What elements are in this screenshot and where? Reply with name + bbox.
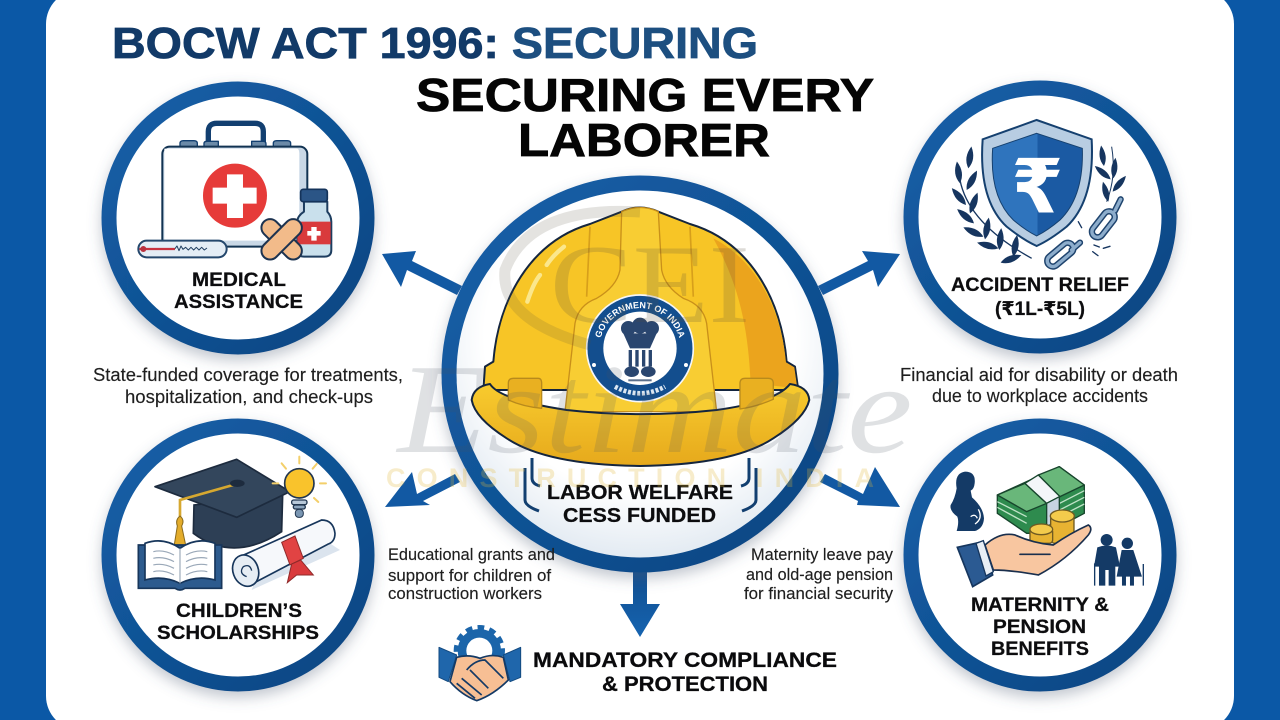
label: (₹1L-₹5L) [995, 299, 1085, 320]
diploma scroll [228, 520, 340, 590]
text: maternity description [744, 545, 893, 603]
label: SCHOLARSHIPS [157, 623, 319, 644]
label: CHILDREN’S [176, 601, 302, 622]
laurel right [1093, 145, 1128, 202]
label: CESS FUNDED [563, 505, 716, 527]
text: maternity description: Maternity leave pay [751, 545, 893, 564]
label: BENEFITS [991, 639, 1089, 660]
text: scholarship description: construction workers [388, 584, 542, 603]
broken chain [1045, 199, 1121, 269]
text: medical description: State-funded coverage for treatments, [93, 365, 403, 385]
label [951, 275, 1129, 320]
pregnant woman silhouette [950, 472, 984, 531]
icon: medicine bottle [297, 189, 331, 257]
hand [985, 525, 1091, 575]
lightbulb [273, 457, 326, 517]
laurel left [949, 146, 1032, 266]
watermark: CONSTRUCTION INDIA [386, 463, 874, 493]
panel: children's scholarships [109, 426, 367, 684]
icon: handshake and gear [439, 627, 521, 701]
icon: thermometer [138, 241, 227, 257]
coins [1030, 510, 1074, 543]
text: compliance: & PROTECTION [602, 673, 768, 696]
cash stack [997, 467, 1084, 533]
panel: medical assistance [109, 89, 367, 347]
icon: graduation cap, book, scroll and bulb [138, 457, 340, 590]
text: compliance: MANDATORY COMPLIANCE [533, 649, 837, 672]
title [112, 19, 874, 166]
text: compliance [533, 649, 837, 696]
label [174, 270, 303, 313]
title: LABORER [518, 114, 770, 166]
label [157, 601, 319, 644]
text: maternity description: for financial security [744, 584, 893, 603]
government emblem [586, 294, 694, 402]
label: MATERNITY & [971, 595, 1109, 616]
government emblem: GOVERNMENT OF INDIA [596, 302, 684, 338]
bracket lines [525, 458, 756, 511]
icon: shield with rupee and laurel [949, 120, 1128, 269]
label: ACCIDENT RELIEF [951, 275, 1129, 296]
panel: accident relief [911, 88, 1169, 346]
icon: hand with money and figures [950, 467, 1143, 587]
elderly couple [1094, 534, 1143, 586]
arrows from hub to benefits [382, 251, 900, 637]
text: scholarship description: support for children of [388, 566, 551, 585]
text: accident description: due to workplace accidents [932, 386, 1148, 406]
label: LABOR WELFARE [547, 482, 733, 504]
hub: central helmet circle [434, 174, 846, 586]
text: scholarship description: Educational grants and [388, 545, 555, 564]
watermark: Estimate [395, 338, 912, 480]
text: maternity description: and old-age pension [746, 565, 893, 584]
title: BOCW ACT 1996: SECURING [112, 19, 758, 68]
panel: maternity and pension [911, 426, 1169, 684]
text: medical description: hospitalization, and check-ups [125, 387, 373, 407]
icon: medical kit [138, 123, 331, 263]
watermark [386, 211, 912, 493]
text: scholarship description [388, 545, 555, 603]
cuff [957, 542, 993, 587]
icon: yellow hard hat [470, 206, 810, 467]
label: ASSISTANCE [174, 292, 303, 313]
label [971, 595, 1109, 660]
icon: crossed bandages [258, 216, 305, 263]
icon: shield with rupee and laurel: ₹ [1011, 145, 1063, 229]
text: accident description: Financial aid for disability or death [900, 365, 1178, 385]
title: SECURING EVERY [416, 69, 874, 121]
label [547, 482, 733, 527]
text: medical description [93, 365, 403, 407]
book [138, 541, 222, 590]
label: MEDICAL [192, 270, 286, 291]
ashoka emblem [621, 318, 659, 381]
label: PENSION [993, 617, 1086, 638]
watermark: CEI [550, 223, 750, 347]
text: accident description [900, 365, 1178, 406]
